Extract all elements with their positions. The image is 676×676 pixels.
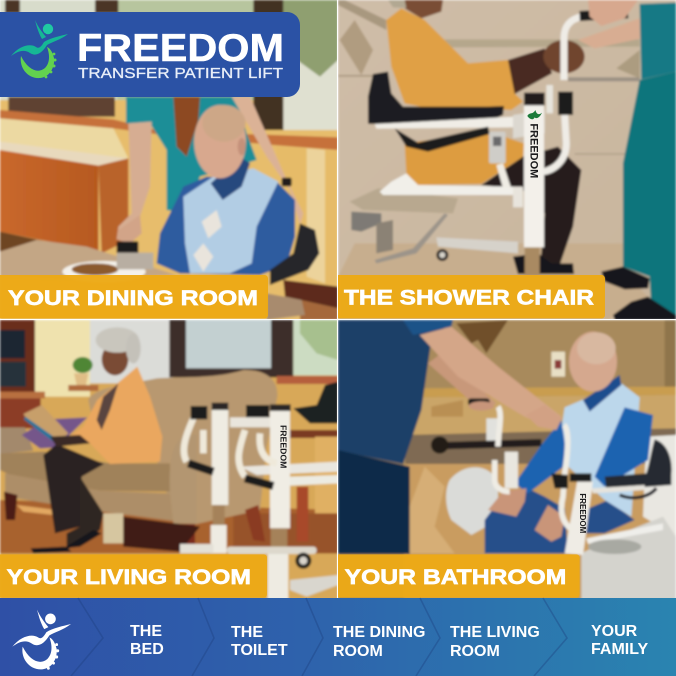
item: the bed: THE: [130, 623, 162, 640]
photo: nurse assisting man on lift in bathroom: [338, 320, 676, 601]
label bar: the shower chair: THE SHOWER CHAIR: [344, 285, 594, 309]
lift column branding: FREEDOM: [279, 425, 289, 468]
chevron dividers: [71, 598, 567, 676]
label bar: your dining room: [0, 275, 268, 318]
item: the dining room: ROOM: [333, 643, 383, 660]
footer ribbon: [0, 598, 676, 676]
lift column branding: FREEDOM: [578, 493, 587, 534]
label bar: the shower chair: [335, 275, 605, 318]
label bar: your bathroom: YOUR BATHROOM: [345, 565, 566, 589]
item: the toilet: THE: [231, 624, 263, 641]
lift column branding: FREEDOM: [528, 123, 540, 178]
panel: your dining room: [0, 0, 338, 320]
photo: woman on lift in shower with nurse: [338, 0, 676, 320]
item: the living room: ROOM: [450, 643, 500, 660]
item: your family: FAMILY: [591, 641, 649, 658]
item: the bed: BED: [130, 641, 164, 658]
panel: your living room: [0, 320, 338, 600]
item: the living room: THE LIVING: [450, 624, 540, 641]
label bar: your bathroom: [335, 554, 580, 598]
logo banner: [0, 12, 300, 97]
photo: man seated at dining table with nurse: [0, 0, 338, 320]
label bar: your living room: YOUR LIVING ROOM: [7, 565, 251, 589]
icon: white freedom logo: [12, 610, 71, 670]
brand tagline: TRANSFER PATIENT LIFT: [78, 65, 283, 82]
panel: your bathroom: [335, 320, 676, 601]
item: the dining room: THE DINING: [333, 624, 425, 641]
item: the toilet: TOILET: [231, 642, 288, 659]
panel: the shower chair: [335, 0, 676, 320]
brand name: FREEDOM: [77, 27, 284, 70]
label bar: your living room: [0, 554, 267, 598]
icon: freedom logo figure: [11, 20, 68, 78]
item: your family: YOUR: [591, 623, 638, 640]
label bar: your dining room: YOUR DINING ROOM: [8, 286, 258, 310]
lift column branding: [527, 110, 542, 178]
photo: woman reading on sofa beside lift: [0, 320, 338, 600]
